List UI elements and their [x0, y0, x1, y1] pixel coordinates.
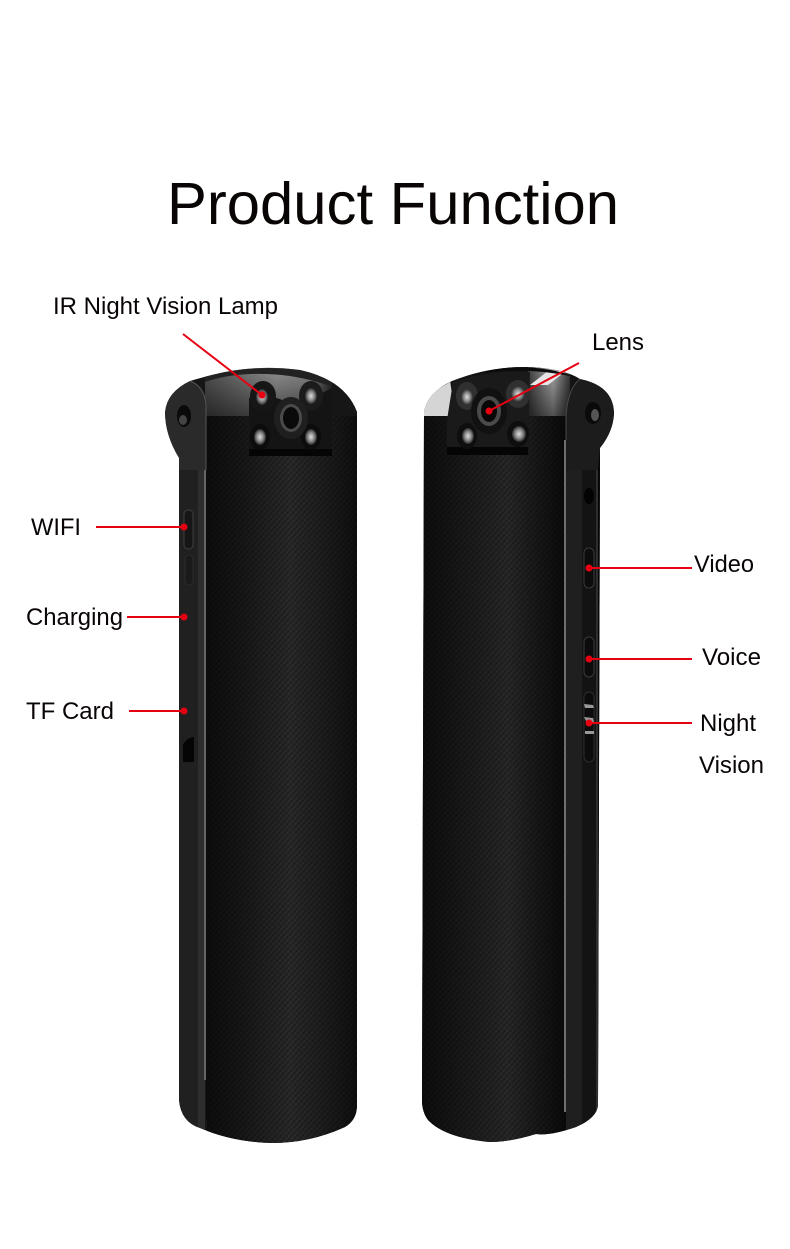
left device body: [160, 360, 360, 1150]
label: TF Card: [26, 698, 188, 725]
label: TF Card: TF Card: [26, 698, 114, 725]
arrow: video leader: [586, 564, 692, 572]
right cap highlight: [424, 367, 578, 416]
right device body: [420, 360, 620, 1150]
left side WIFI button: [184, 510, 193, 549]
right camera module: [447, 372, 530, 455]
label: Charging: [26, 604, 188, 631]
label: Night Vision: Vision: [699, 752, 764, 779]
right side night vision switch: [584, 692, 594, 762]
label: Voice: [586, 644, 761, 671]
left side slot: [183, 737, 194, 762]
label: Night Vision: Night: [700, 710, 756, 737]
right side video button: [584, 548, 594, 588]
arrow: lens leader: [486, 363, 579, 414]
label: WIFI: [31, 514, 188, 541]
label: Video: Video: [694, 551, 754, 578]
label: WIFI: WIFI: [31, 514, 81, 541]
label: Voice: Voice: [702, 644, 761, 671]
arrow: IR lamp leader: [183, 334, 266, 398]
label: Video: [586, 551, 754, 578]
left side rail: [179, 420, 207, 1130]
arrow: night vision leader: [586, 720, 692, 726]
left camera module: [249, 381, 332, 456]
right device: [420, 360, 620, 1150]
label: Charging: Charging: [26, 604, 123, 631]
label: IR Night Vision Lamp: IR Night Vision Lamp: [53, 293, 278, 320]
arrow: WIFI leader: [96, 524, 188, 530]
right side rail: [564, 440, 600, 1130]
label: IR Night Vision Lamp: [53, 293, 278, 398]
label: Lens: Lens: [592, 329, 644, 356]
right side mic hole: [584, 488, 594, 504]
left side notch: [185, 555, 193, 585]
label: Lens: [486, 329, 644, 414]
arrow: TF card leader: [129, 708, 188, 714]
right side voice button: [584, 637, 594, 677]
label: Night Vision: [586, 710, 764, 779]
arrow: charging leader: [127, 614, 188, 620]
arrow: voice leader: [586, 656, 692, 662]
right hinge with hole: [566, 379, 614, 470]
left hinge with hole: [165, 381, 206, 470]
left device: [160, 360, 360, 1150]
title: Product Function: [167, 171, 619, 237]
left cap highlight: [205, 368, 357, 416]
